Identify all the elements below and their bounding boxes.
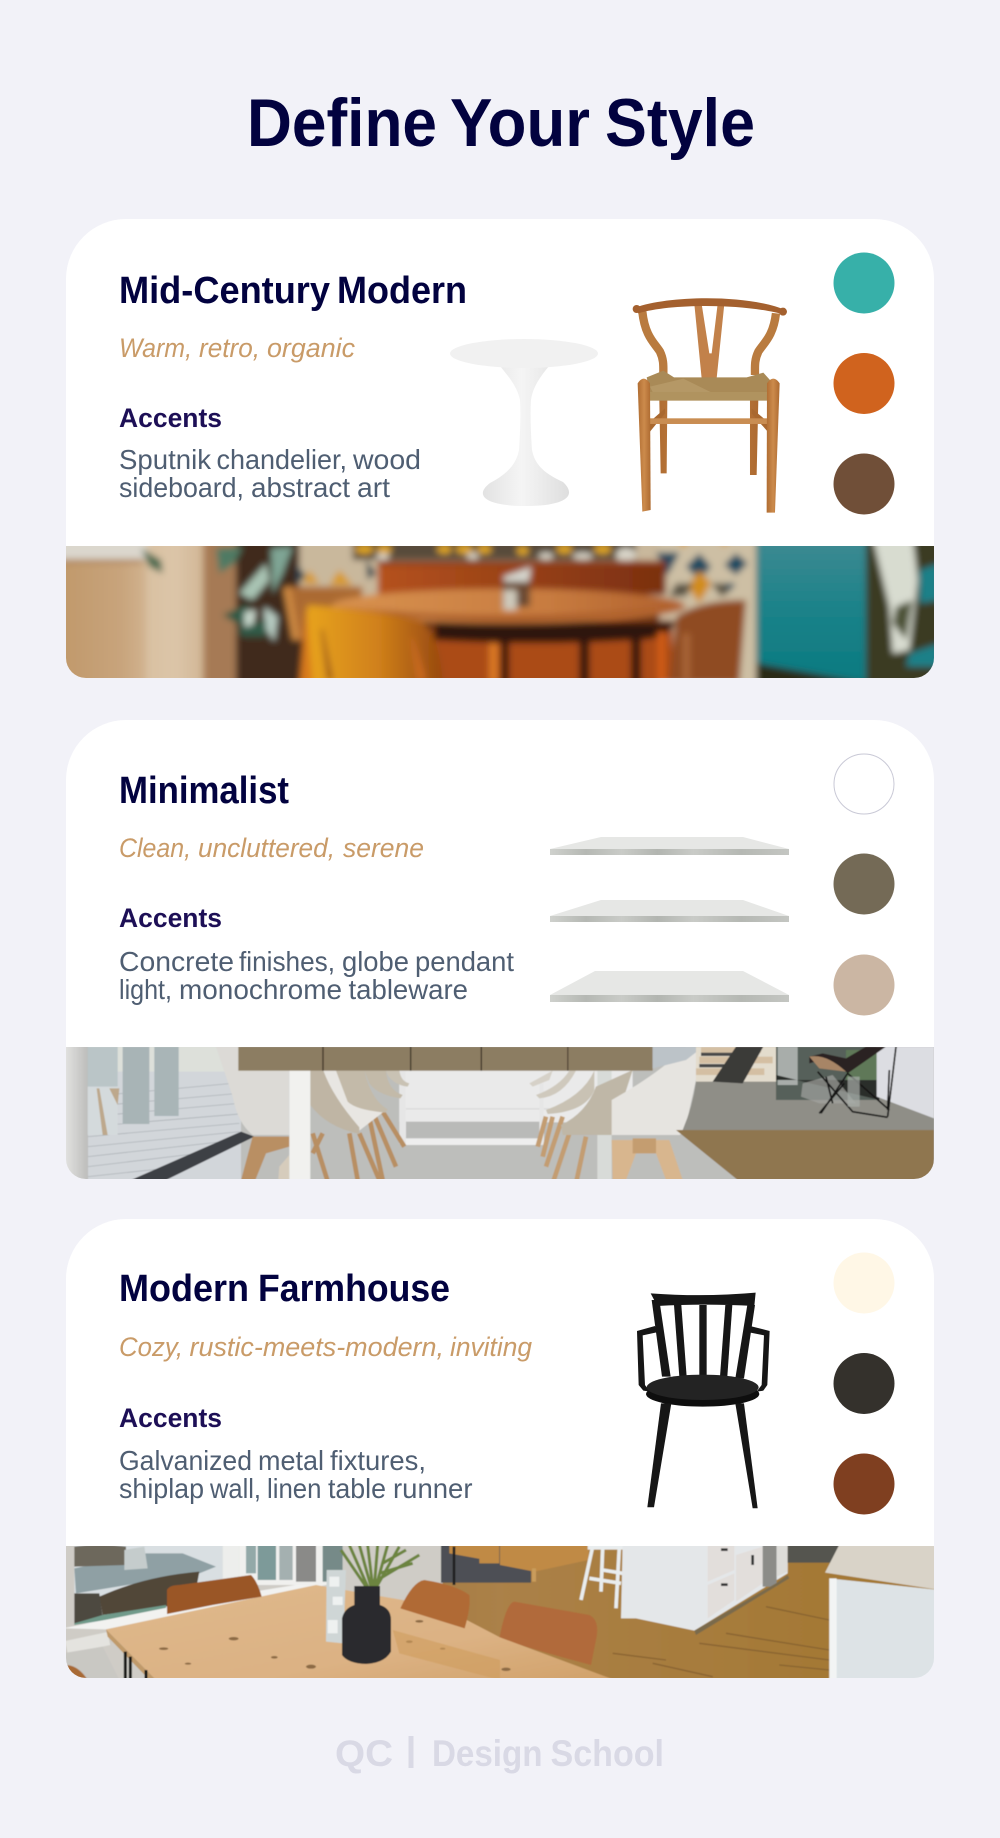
icon: wishbone chair — [633, 298, 787, 513]
footer logo: School — [550, 1733, 664, 1774]
colour swatches — [834, 1252, 894, 1514]
accents text: wood — [352, 444, 421, 475]
tagline: inviting — [450, 1332, 532, 1362]
table legs — [289, 1070, 310, 1183]
accents text: globe — [342, 946, 409, 977]
panel: Modern Farmhouse — [63, 1219, 939, 1687]
counter and island — [825, 1543, 939, 1590]
accents text — [119, 1445, 472, 1504]
accents text: wall, — [209, 1473, 261, 1504]
large left chair — [226, 1070, 290, 1136]
title: Style — [605, 85, 755, 161]
plant — [341, 1545, 419, 1587]
chair right — [499, 1602, 597, 1665]
accents text: abstract — [251, 472, 350, 503]
photo: minimalist dining room — [66, 1047, 934, 1179]
right room — [682, 1081, 934, 1131]
title: Define — [247, 85, 437, 161]
accents text: light, — [119, 974, 172, 1005]
accents text: linen — [267, 1473, 322, 1504]
tagline: serene — [343, 833, 424, 863]
icon: black chair — [637, 1293, 770, 1508]
stool — [581, 1547, 623, 1608]
accents text: sideboard, — [119, 472, 244, 503]
card background — [66, 1219, 934, 1560]
icon: marble shelves — [550, 837, 789, 1002]
heading: Modern — [119, 1268, 249, 1310]
glass vase — [326, 1570, 346, 1643]
card background — [66, 219, 934, 560]
accents text: monochrome — [179, 974, 342, 1005]
window left — [74, 1543, 223, 1623]
accents text: chandelier, — [216, 444, 347, 475]
panel: Minimalist — [63, 720, 937, 1187]
icon: tulip table — [450, 339, 598, 506]
table top — [238, 1047, 653, 1071]
heading: Farmhouse — [258, 1268, 450, 1310]
leaves and table object — [141, 547, 531, 642]
accents text: runner — [393, 1473, 472, 1504]
accents text: Galvanized — [119, 1445, 252, 1476]
heading: Minimalist — [119, 770, 289, 812]
footer logo — [335, 1733, 664, 1774]
accents label: Accents — [119, 403, 222, 433]
tagline: Cozy, — [119, 1332, 183, 1362]
accents text: shiplap — [119, 1473, 204, 1504]
tagline: retro, — [199, 333, 260, 363]
accents text: pendant — [415, 946, 514, 977]
footer logo: QC — [335, 1733, 393, 1774]
dark rug and sofa — [441, 1543, 531, 1583]
chair behind table — [167, 1575, 262, 1614]
table top — [106, 1584, 610, 1678]
cabinet — [621, 1543, 788, 1631]
heading: Mid-Century — [119, 270, 330, 312]
accents text: table — [328, 1473, 386, 1504]
card background — [66, 720, 934, 1060]
accents text: Sputnik — [119, 444, 212, 475]
tagline: rustic-meets-modern, — [190, 1332, 444, 1362]
heading: Modern — [337, 270, 467, 312]
accents text — [119, 444, 421, 503]
title: Your — [450, 85, 590, 161]
accents label: Accents — [119, 1403, 222, 1433]
accents text: metal — [258, 1445, 324, 1476]
photo: farmhouse dining room — [66, 1546, 934, 1678]
colour swatches — [834, 252, 894, 514]
plank lines — [613, 1607, 829, 1677]
panel: Mid-Century Modern — [53, 219, 953, 697]
colour swatches — [834, 754, 894, 1016]
accents text: art — [357, 472, 390, 503]
tagline: Clean, — [119, 833, 191, 863]
tagline: uncluttered, — [198, 833, 335, 863]
accents text: Concrete — [119, 946, 234, 977]
black vase — [342, 1586, 391, 1664]
footer logo: Design — [432, 1733, 542, 1774]
right chairs — [538, 1117, 586, 1183]
accents text: tableware — [348, 974, 468, 1005]
accents label: Accents — [119, 903, 222, 933]
accents text: fixtures, — [330, 1445, 426, 1476]
accents text: finishes, — [239, 946, 335, 977]
accents text — [119, 946, 514, 1005]
tagline: organic — [267, 333, 355, 363]
tagline: Warm, — [119, 333, 192, 363]
photo: mid-century dining room — [66, 546, 934, 678]
